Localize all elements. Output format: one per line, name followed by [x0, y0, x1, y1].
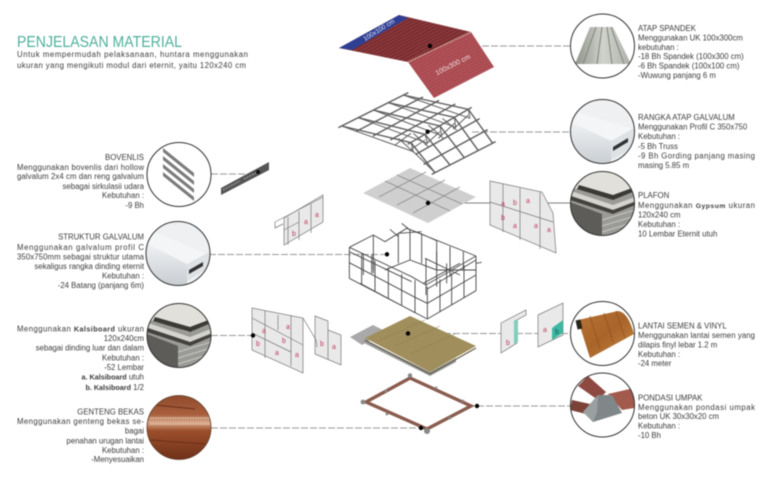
text: kalsiboard: Kebutuhan :: [102, 354, 144, 362]
text: kalsiboard: Menggunakan Kalsiboard ukuran: [17, 324, 144, 334]
text: rangka atap galvalum: masing 5.85 m: [638, 161, 689, 170]
text: plafon: 120x240 cm: [638, 210, 680, 220]
text: lantai semen & vinyl: [638, 322, 755, 368]
text: rangka atap galvalum: -9 Bh Gording panjang masing: [638, 152, 755, 160]
text: plafon: [638, 191, 755, 238]
text: struktur galvalum: Kebutuhan :: [102, 272, 144, 280]
circle: atap spandek photo: [570, 13, 635, 79]
text: struktur galvalum: STRUKTUR GALVALUM: [58, 233, 144, 242]
text: kalsiboard: [17, 324, 144, 392]
text: bovenlis: galvalum 2x4 cm dan reng galvalum: [17, 172, 144, 181]
text: bovenlis: Menggunakan bovenlis dari hollow: [17, 163, 144, 172]
ceiling plafon: [363, 168, 476, 223]
text: atap spandek: -6 Bh Spandek (100x100 cm): [638, 62, 740, 70]
text: atap spandek: ATAP SPANDEK: [638, 24, 697, 33]
text: bovenlis: sebagai sirkulasii udara: [63, 182, 145, 191]
text: bovenlis: BOVENLIS: [105, 153, 144, 162]
wall panels upper right: b: [501, 215, 505, 222]
text: lantai semen & vinyl: Kebutuhan :: [638, 350, 680, 359]
wall panels lower right: [501, 303, 563, 353]
text: struktur galvalum: Menggunakan galvalum profil C: [17, 243, 144, 252]
text: pondasi umpak: Kebutuhan :: [638, 422, 680, 430]
text: atap spandek: [638, 24, 744, 80]
text: lantai semen & vinyl: Menggunakan lantai semen yang: [638, 331, 755, 340]
circle: lantai vinyl photo: [570, 301, 635, 367]
wall panels upper right: a: [526, 198, 530, 205]
text: atap spandek: kebutuhan :: [638, 43, 679, 52]
wall panels lower left: a: [286, 324, 290, 331]
text: plafon: Kebutuhan :: [638, 220, 680, 229]
leader lines: [209, 46, 571, 428]
text: genteng bekas: [17, 408, 144, 464]
text: genteng bekas: Kebutuhan :: [102, 446, 144, 455]
wall structure frame: [349, 223, 482, 319]
wall panels upper right: b: [513, 200, 517, 207]
text: plafon: 10 Lembar Eternit utuh: [638, 230, 717, 238]
text: kalsiboard: b. Kalsiboard 1/2: [85, 383, 144, 392]
circle: kalsiboard photo: [147, 303, 211, 368]
circle: bovenlis photo: [147, 142, 211, 207]
circle: pondasi umpak photo: [570, 372, 635, 438]
text: genteng bekas: penahan urugan lantai: [66, 436, 144, 446]
wall panels lower left: b: [256, 341, 260, 348]
text: atap spandek: Menggunakan UK 100x300cm: [638, 34, 743, 42]
roof: exploded spandek layer: 100x300 cm: [435, 54, 472, 77]
wall panels lower left: [251, 308, 303, 373]
text: pondasi umpak: beton UK 30x30x20 cm: [638, 412, 719, 421]
wall panels upper right: a: [513, 223, 517, 230]
circle: struktur galvalum photo: [146, 221, 210, 286]
text: pondasi umpak: [638, 394, 755, 440]
wall panels lower middle: b: [320, 341, 324, 348]
circle: plafon photo: [570, 171, 635, 237]
text: plafon: Menggunakan Gypsum ukuran: [638, 201, 755, 210]
wall panels lower left: b: [282, 338, 286, 345]
title: PENJELASAN MATERIAL: [17, 34, 182, 51]
text: pondasi umpak: -10 Bh: [638, 431, 661, 440]
bovenlis assembly: [221, 162, 269, 195]
text: genteng bekas: Menggunakan genteng bekas se-: [17, 417, 144, 426]
text: lantai semen & vinyl: LANTAI SEMEN & VINYL: [638, 322, 727, 331]
text: lantai semen & vinyl: dilapis finyl lebar 1.2 m: [638, 340, 717, 350]
text: rangka atap galvalum: [638, 113, 755, 170]
text: bovenlis: [17, 153, 145, 210]
text: struktur galvalum: -24 Batang (panjang 6m): [58, 281, 144, 290]
circle: genteng bekas photo: [147, 395, 211, 460]
wall panels upper left: a: [304, 219, 308, 226]
text: struktur galvalum: 350x750mm sebagai struktur utama: [17, 252, 145, 262]
text: kalsiboard: sebagai dinding luar dan dalam: [36, 344, 144, 352]
text: struktur galvalum: sekaligus rangka dinding eternit: [34, 262, 145, 271]
wall panels upper right: a: [547, 227, 551, 234]
wall panels upper left: a: [315, 212, 319, 219]
text: pondasi umpak: PONDASI UMPAK: [638, 394, 703, 403]
intro text: ukuran yang mengikuti modul dari eternit, yaitu 120x240 cm: [17, 61, 246, 70]
wall panels lower right: a: [543, 327, 547, 334]
text: bovenlis: Kebutuhan :: [102, 191, 144, 200]
wall panels upper right: a: [534, 223, 538, 230]
text: rangka atap galvalum: Kebutuhan :: [638, 132, 680, 141]
roof: exploded spandek layer: [339, 15, 494, 98]
wall panels lower left: a: [262, 328, 266, 335]
text: kalsiboard: 120x240cm: [104, 334, 144, 343]
text: rangka atap galvalum: RANGKA ATAP GALVALUM: [638, 113, 735, 122]
roof truss frame: [338, 93, 496, 174]
wall panels upper right: a: [501, 201, 505, 208]
text: lantai semen & vinyl: -24 meter: [638, 359, 672, 368]
floor slab: [350, 316, 476, 376]
wall panels lower middle: a: [332, 344, 336, 351]
text: bovenlis: -9 Bh: [125, 201, 144, 210]
text: rangka atap galvalum: -5 Bh Truss: [638, 142, 678, 151]
wall panels upper left: b: [292, 231, 296, 238]
intro text: [17, 50, 248, 70]
wall panels lower right: b: [555, 329, 559, 336]
text: struktur galvalum: [17, 233, 145, 290]
wall panels lower left: a: [295, 352, 299, 359]
text: kalsiboard: -52 Lembar: [104, 363, 144, 372]
roof: exploded spandek layer: 100x100 cm: [362, 18, 396, 43]
wall panels lower middle: [303, 316, 341, 365]
foundation ring: [361, 373, 479, 434]
wall panels upper left: [275, 195, 323, 245]
wall panels lower right: b: [506, 340, 510, 347]
intro text: Untuk mempermudah pelaksanaan, huntara menggunakan: [17, 50, 248, 59]
text: genteng bekas: -Menyesuaikan: [91, 455, 144, 464]
wall panels lower left: a: [275, 350, 279, 357]
text: atap spandek: -Wuwung panjang 6 m: [638, 71, 716, 80]
text: rangka atap galvalum: Menggunakan Profil C 350x750: [638, 122, 748, 132]
text: plafon: PLAFON: [638, 191, 669, 200]
wall panels upper right: [490, 181, 556, 253]
text: kalsiboard: a. Kalsiboard utuh: [82, 372, 144, 382]
text: genteng bekas: bagai: [125, 427, 144, 436]
circle: rangka atap photo: [570, 99, 635, 165]
text: pondasi umpak: Menggunakan pondasi umpak: [638, 403, 755, 412]
text: atap spandek: -18 Bh Spandek (100x300 cm): [638, 52, 744, 61]
text: genteng bekas: GENTENG BEKAS: [77, 408, 144, 417]
